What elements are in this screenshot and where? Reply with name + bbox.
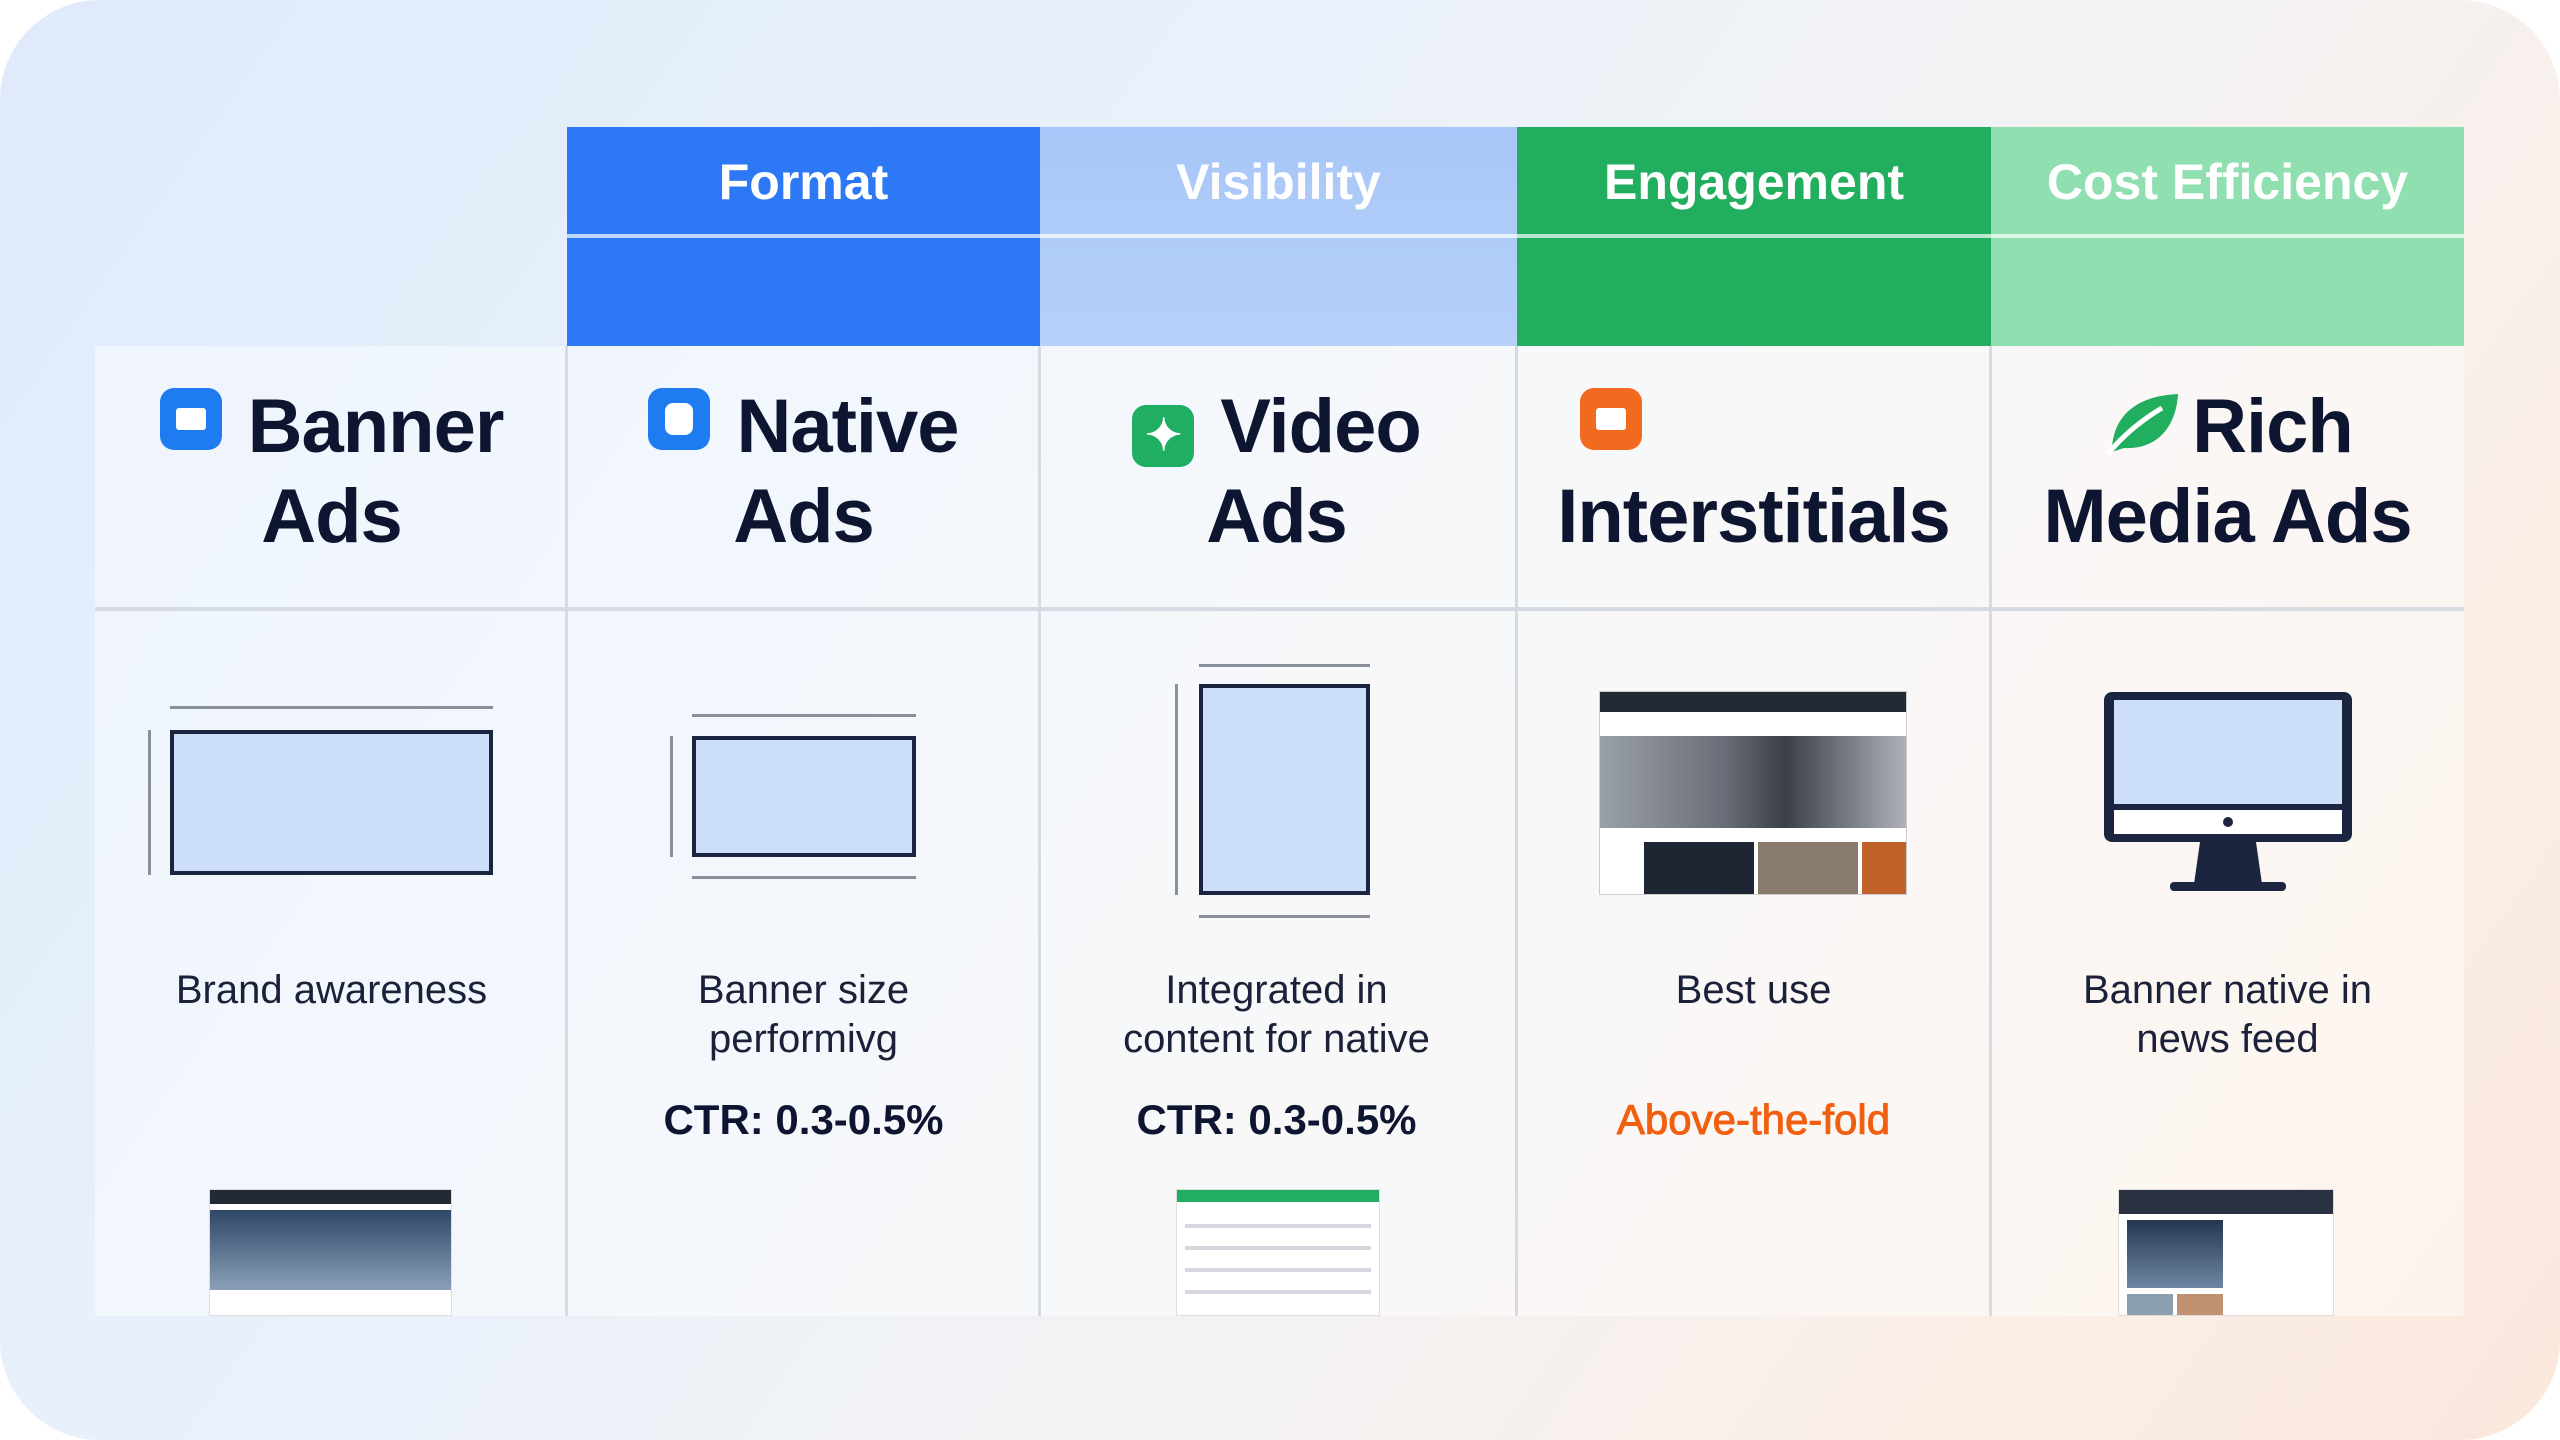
header: Visibility: Visibility xyxy=(1176,154,1381,210)
text: Banner size performing xyxy=(698,968,909,1061)
text: Banner native in news feed: Banner native in xyxy=(2083,968,2372,1012)
title: Video Ads: Video xyxy=(1220,384,1421,469)
stat: above the fold: Above-the-fold xyxy=(1617,1096,1890,1143)
title: Rich Media Ads: Rich xyxy=(2192,384,2353,469)
title: Rich Media Ads: Media Ads xyxy=(2043,474,2412,559)
header: Format xyxy=(567,127,1040,346)
image: interstitial website screenshot xyxy=(1599,691,1907,895)
icon: desktop monitor xyxy=(2104,692,2352,891)
text: Integrated in content: content for native xyxy=(1123,1017,1430,1061)
title: Video Ads: Ads xyxy=(1206,474,1347,559)
header: Cost Efficiency xyxy=(1991,127,2464,346)
thumbnail: banner page xyxy=(209,1189,452,1316)
title: Native Ads xyxy=(648,384,959,559)
diagram: native rectangle xyxy=(670,714,916,879)
table body background xyxy=(95,346,2464,1316)
title: Native Ads: Native xyxy=(736,384,959,469)
title: Banner Ads: Banner xyxy=(248,384,503,469)
title: Video Ads xyxy=(1132,384,1421,559)
title: Banner Ads: Ads xyxy=(261,474,402,559)
text: Banner size performing: Banner size xyxy=(698,968,909,1012)
thumbnail: video list page xyxy=(1176,1189,1380,1316)
header: Engagement xyxy=(1517,127,1991,346)
title: Banner Ads xyxy=(160,384,504,559)
text: Brand awareness: Brand awareness xyxy=(176,968,487,1012)
title: Rich Media Ads xyxy=(2043,384,2412,559)
header: Visibility xyxy=(1040,127,1517,346)
title: Video Ads: ✦ xyxy=(1145,411,1181,460)
header: Cost Efficiency: Cost Efficiency xyxy=(2047,154,2408,210)
title: Interstitials xyxy=(1557,388,1950,559)
stat: video CTR: CTR: 0.3-0.5% xyxy=(1136,1096,1417,1143)
title: Interstitials: Interstitials xyxy=(1557,474,1950,559)
header: Format: Format xyxy=(719,154,888,210)
thumbnail: news feed page xyxy=(2118,1189,2334,1316)
stat: native CTR: CTR: 0.3-0.5% xyxy=(663,1096,944,1143)
text: Banner size performing: performivg xyxy=(709,1017,898,1061)
text: Integrated in content: Integrated in xyxy=(1165,968,1388,1012)
header: Engagement: Engagement xyxy=(1604,154,1904,210)
text: Banner native in news feed: news feed xyxy=(2136,1017,2319,1061)
diagram: video rectangle xyxy=(1175,664,1370,918)
text: Banner native in news feed xyxy=(2083,968,2372,1061)
diagram: banner rectangle xyxy=(148,706,493,875)
title: Native Ads: Ads xyxy=(733,474,874,559)
text: Best use: Best use xyxy=(1676,968,1831,1012)
text: Integrated in content xyxy=(1123,968,1430,1061)
